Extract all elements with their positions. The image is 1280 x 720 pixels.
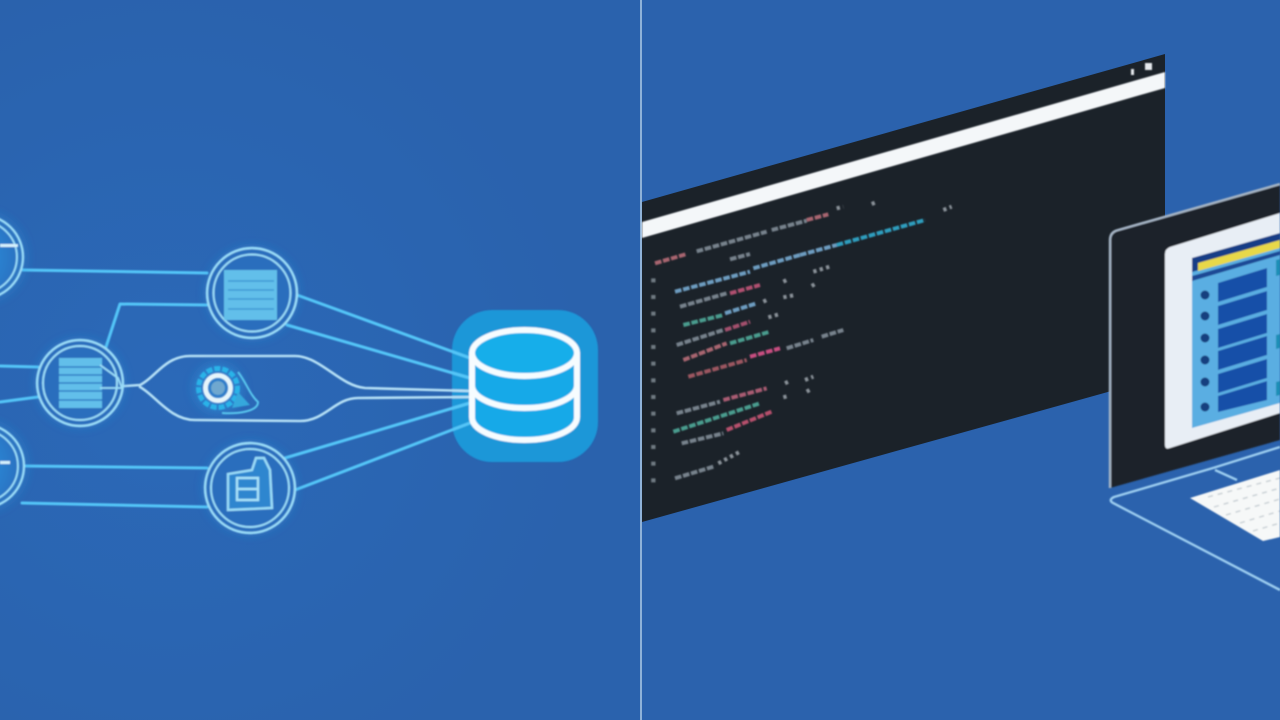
table rows (1218, 268, 1267, 412)
key rows (1208, 478, 1280, 531)
node: middle list (35, 338, 125, 428)
panel: code editor window (642, 54, 1165, 522)
dashboard header bar (1192, 233, 1280, 272)
node: bottom document (203, 441, 297, 535)
center divider (640, 0, 642, 720)
icon: database (472, 330, 577, 440)
trackpad edge (1215, 470, 1237, 480)
connector lines (0, 270, 470, 507)
row icons (1200, 290, 1210, 412)
window controls (1131, 63, 1152, 75)
left panel background (0, 0, 640, 720)
window title bar (642, 72, 1165, 238)
laptop lid (1110, 184, 1280, 488)
panel: laptop (1110, 184, 1280, 590)
node: upper-left partial (0, 211, 27, 303)
dashboard screen (1192, 233, 1280, 428)
laptop base outline (1111, 447, 1280, 590)
keyboard (1190, 470, 1280, 541)
sidebar strip (1192, 251, 1280, 281)
screen bezel (1165, 213, 1280, 449)
panel: data pipeline (0, 211, 598, 535)
code lines (653, 203, 952, 487)
icon: central gear (193, 363, 258, 413)
node: lower-left partial (0, 420, 28, 512)
node: top document (205, 246, 299, 340)
bypass route (110, 356, 470, 421)
lid outline (1110, 184, 1280, 488)
right column cells (1276, 259, 1280, 396)
yellow highlight bar (1198, 240, 1280, 271)
window body (642, 54, 1165, 522)
database icon tile (452, 310, 598, 462)
line numbers (647, 278, 660, 487)
